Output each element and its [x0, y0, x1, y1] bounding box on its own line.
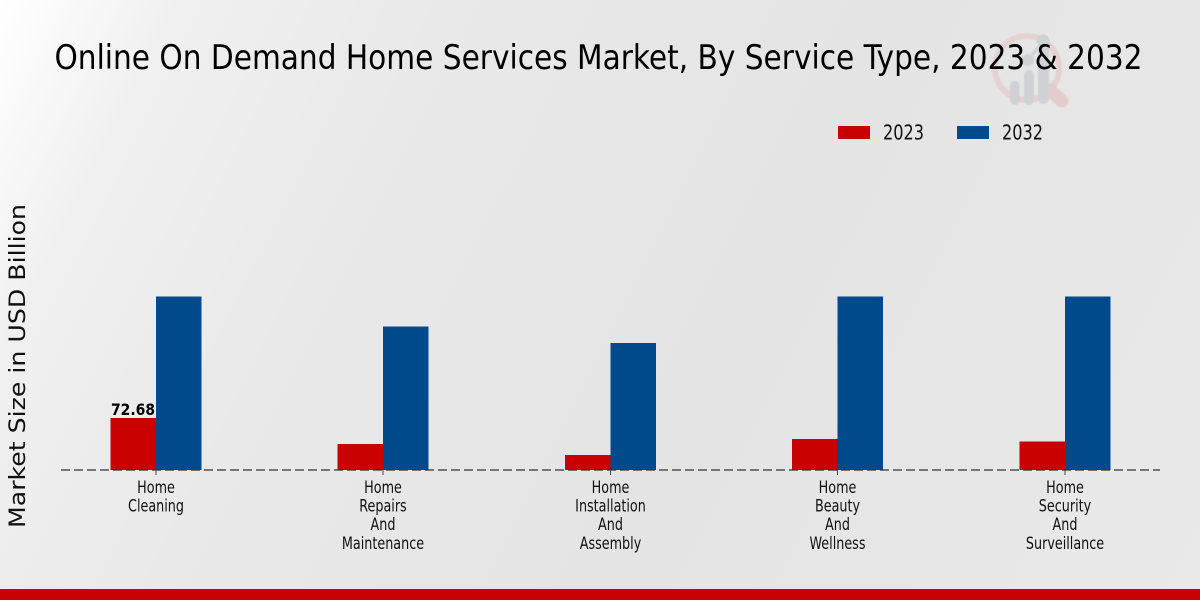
category label: Home Security And Surveillance: Surveillance	[1026, 534, 1104, 553]
bars: Home Cleaning	[110, 296, 202, 470]
category label: Home Repairs And Maintenance: And	[371, 515, 395, 534]
legend item: 2023: 2023	[883, 120, 924, 144]
icon: watermark magnifier logo	[995, 34, 1062, 105]
bars: Home Installation And Assembly	[565, 343, 656, 470]
bar chart	[110, 296, 1110, 470]
category label: Home Installation And Assembly: Home	[592, 478, 629, 497]
category label: Home Cleaning	[128, 478, 184, 516]
bars: Home Beauty And Wellness	[792, 296, 883, 470]
category label: Home Security And Surveillance: Home	[1046, 478, 1084, 497]
category label: Home Installation And Assembly: Installation	[575, 496, 646, 516]
category label: Home Beauty And Wellness: Home	[819, 478, 856, 497]
bottom red band	[0, 589, 1200, 600]
category label: Home Installation And Assembly	[575, 478, 646, 553]
value label: 72.68: 72.68	[111, 400, 155, 419]
category label: Home Repairs And Maintenance: Home	[364, 478, 402, 497]
category label: Home Beauty And Wellness: And	[825, 515, 850, 534]
category label: Home Security And Surveillance: Security	[1039, 496, 1091, 516]
category label: Home Beauty And Wellness	[810, 478, 865, 553]
category label: Home Security And Surveillance: And	[1053, 515, 1077, 534]
title: Online On Demand Home Services Market, By Service Type, 2023 & 2032	[54, 38, 1142, 77]
category label: Home Cleaning: Cleaning	[128, 496, 184, 516]
category label: Home Installation And Assembly: Assembly	[580, 534, 641, 553]
legend	[838, 120, 1043, 144]
category label: Home Repairs And Maintenance	[342, 478, 424, 553]
category label: Home Beauty And Wellness: Wellness	[810, 534, 865, 553]
legend item: 2023	[838, 120, 924, 144]
category label: Home Installation And Assembly: And	[598, 515, 623, 534]
category label: Home Security And Surveillance	[1026, 478, 1104, 553]
bars: Home Repairs And Maintenance	[338, 326, 428, 470]
category label: Home Repairs And Maintenance: Maintenance	[342, 534, 424, 553]
category label: Home Cleaning: Home	[137, 478, 175, 497]
category label: Home Repairs And Maintenance: Repairs	[359, 496, 407, 516]
category label: Home Beauty And Wellness: Beauty	[815, 496, 860, 516]
y axis label: Market Size in USD Billion	[6, 204, 31, 528]
legend item: 2032: 2032	[1002, 120, 1043, 144]
bars: Home Security And Surveillance	[1020, 296, 1110, 470]
legend item: 2032	[957, 120, 1043, 144]
